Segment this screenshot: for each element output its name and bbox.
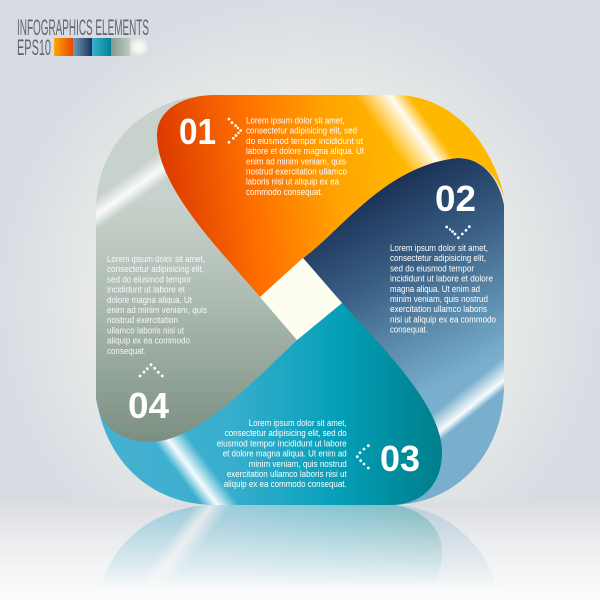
section 04 [107,254,207,426]
text block 03: consectetur adipisicing elit, sed do [225,428,347,438]
text: INFOGRAPHICS ELEMENTS [17,15,149,40]
text block 03: et dolore magna aliqua. Ut enim ad [223,449,347,459]
text block 02: nisi ut aliquip ex ea commodo [390,314,496,324]
text block 01: labore et dolore magna aliqua. Ut [246,146,364,156]
text block 04: Lorem ipsum dolor sit amet, [107,254,205,264]
text block 04: aliquip ex ea commodo [107,336,190,346]
text block 02: sed do eiusmod tempor [390,263,474,273]
arrow: dotted chevron right [228,118,242,144]
text block 03 [217,418,347,489]
number 02: 02 [435,178,476,219]
number 03: 03 [380,438,420,479]
petal 03: teal [96,303,442,505]
arrow: dotted chevron left [356,444,370,469]
section 03 [217,418,420,489]
text block 04 [107,254,207,356]
text block 01: consectetur adipisicing elit, sed [246,126,357,136]
text block 01: do eiusmod tempor incididunt ut [246,136,363,146]
text block 03: eiusmod tempor incididunt ut labore [217,438,347,448]
text block 02: consequat. [390,325,428,335]
text block 02: exercitation ullamco laboris [390,304,487,314]
section 01 [179,111,364,197]
text block 04: enim ad minim veniam, quis [107,305,207,315]
arrow: dotted chevron up [139,363,164,377]
text block 03: aliquip ex ea commodo consequat. [224,479,347,489]
petal 04: grey [96,95,297,442]
text block 03: Lorem ipsum dolor sit amet, [249,418,347,428]
number 01: 01 [179,111,216,152]
text block 02: minim veniam, quis nostrud [390,294,488,304]
centre square [260,258,342,340]
text block 04: incididunt ut labore et [107,285,185,295]
text block 03: exercitation ullamco laboris nisi ut [227,469,347,479]
text block 01: commodo consequat. [246,187,323,197]
text block 04: consectetur adipisicing elit, [107,264,204,274]
text block 04: ullamco laboris nisi ut [107,325,184,335]
text block 02 [390,243,496,335]
text block 01 [246,116,364,197]
petal 01: orange [157,95,505,297]
text block 02: Lorem ipsum dolor sit amet, [390,243,488,253]
text block 04: sed do eiusmod tempor [107,274,191,284]
text block 04: consequat. [107,346,146,356]
text block 02: magna aliqua. Ut enim ad [390,284,480,294]
text block 04: nostrud exercitation [107,315,178,325]
number 04: 04 [128,385,169,426]
text block 04: dolore magna aliqua. Ut [107,295,192,305]
title: infographics elements: EPS10 [17,35,51,60]
petal 02: dark blue [303,158,504,505]
text block 03: minim veniam, quis nostrud [249,459,347,469]
text block 01: enim ad minim veniam, quis [246,156,346,166]
text block 01: Lorem ipsum dolor sit amet, [246,116,345,126]
colour swatches [54,37,149,57]
reflection of the shape on the floor [104,505,492,583]
text block 02: incididunt ut labore et dolore [390,274,493,284]
arrow: dotted chevron down [445,225,471,239]
title: infographics elements [17,15,149,60]
section 02 [390,178,496,335]
text block 01: nostrud exercitation ullamco [246,166,347,176]
text block 02: consectetur adipisicing elit, [390,253,486,263]
text block 01: laboris nisi ut aliquip ex ea [246,177,339,187]
